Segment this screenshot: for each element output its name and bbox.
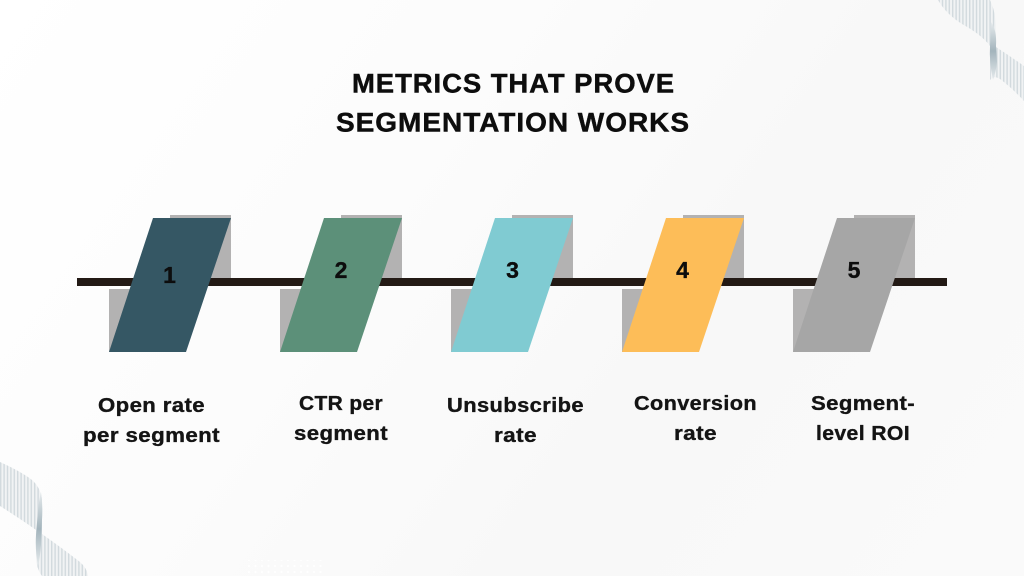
label 4 <box>634 393 757 445</box>
timeline bar <box>77 278 947 286</box>
decorative ribbon: top right <box>938 0 1024 101</box>
label 3 <box>447 395 584 447</box>
decorative ribbon: bottom left <box>0 462 88 576</box>
decorative dot grid <box>248 560 326 576</box>
step 2: 2 <box>335 257 347 283</box>
title <box>336 68 690 138</box>
label 3: rate <box>494 425 537 447</box>
label 4: rate <box>674 423 717 445</box>
step 3: 3 <box>506 257 519 283</box>
step 2 <box>280 215 402 352</box>
title: SEGMENTATION WORKS <box>336 108 690 138</box>
step 5: 5 <box>848 257 861 283</box>
label 1 <box>83 395 220 447</box>
step 3 <box>451 215 573 352</box>
label 2: CTR per <box>299 393 383 415</box>
label 5 <box>811 393 915 445</box>
step 1 <box>109 215 231 352</box>
label 1: per segment <box>83 425 220 447</box>
step 4 <box>622 215 744 352</box>
label 5: level ROI <box>816 423 910 445</box>
label 2 <box>294 393 388 445</box>
label 5: Segment- <box>811 393 915 415</box>
label 4: Conversion <box>634 393 757 415</box>
step 5 <box>793 215 915 352</box>
step 1: 1 <box>163 262 176 288</box>
step 4: 4 <box>676 257 689 283</box>
label 2: segment <box>294 423 388 445</box>
label 1: Open rate <box>98 395 205 417</box>
title: METRICS THAT PROVE <box>352 68 675 98</box>
label 3: Unsubscribe <box>447 395 584 417</box>
